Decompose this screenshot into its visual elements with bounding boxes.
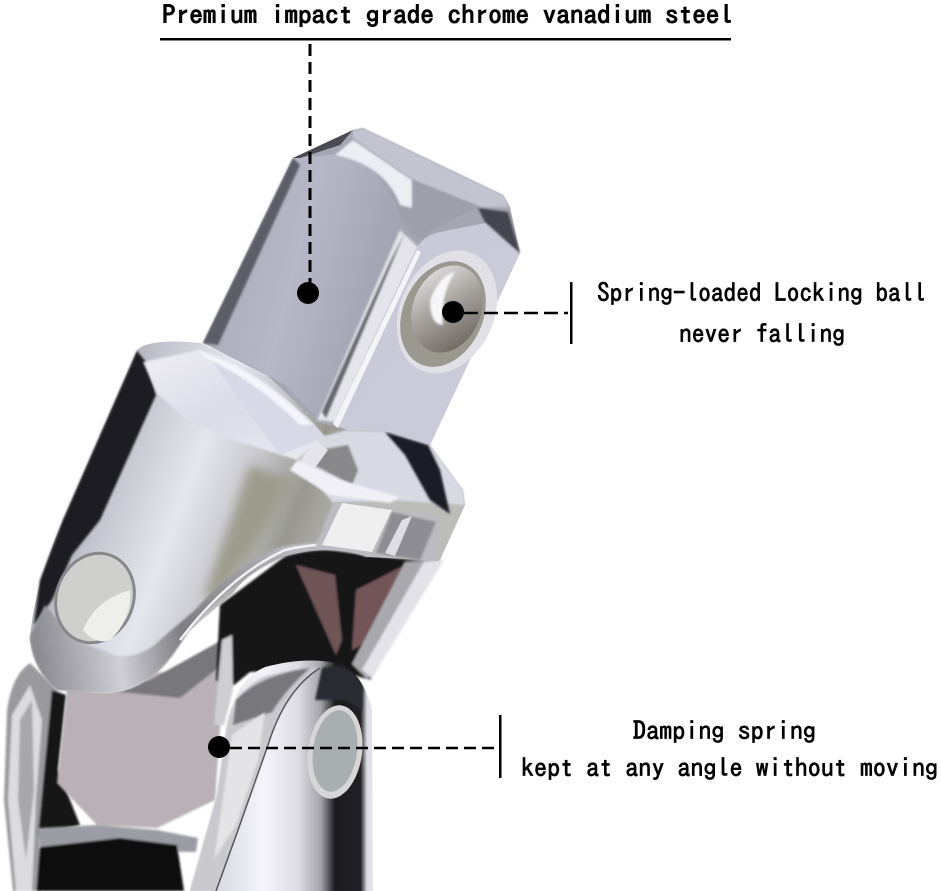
label line one: Damping spring bbox=[633, 718, 816, 744]
upper pin bbox=[41, 540, 149, 656]
label line one: Spring-loaded Locking ball bbox=[597, 280, 926, 306]
heading text: Premium impact grade chrome vanadium steel bbox=[162, 2, 733, 28]
bright lip line bbox=[180, 544, 360, 640]
dark edge strip bbox=[34, 351, 156, 625]
right face bbox=[333, 222, 520, 445]
marker dot bbox=[297, 282, 319, 304]
top chamfers bbox=[353, 128, 510, 207]
dark stripe above pin bbox=[315, 666, 363, 710]
cap diagonal reflection bbox=[205, 352, 325, 455]
lower yoke right arm bbox=[190, 660, 373, 891]
heading underline bbox=[160, 38, 731, 40]
right collar bbox=[297, 430, 465, 505]
bracket bar bbox=[499, 715, 502, 778]
callout: steel material bbox=[160, 2, 733, 304]
dashed leader bbox=[464, 312, 568, 314]
marker dot bbox=[442, 301, 464, 323]
bracket bar bbox=[570, 282, 572, 344]
dark interior of the joint bbox=[214, 545, 444, 725]
flat face bbox=[203, 153, 400, 417]
cap top bbox=[143, 350, 325, 460]
callout: damping spring bbox=[208, 715, 938, 781]
square drive end bbox=[203, 128, 520, 445]
olive reflection bbox=[205, 465, 295, 600]
lower square block bbox=[37, 640, 225, 891]
marker dot bbox=[208, 736, 230, 758]
upper yoke body bbox=[30, 342, 465, 693]
dashed leader bbox=[308, 44, 312, 285]
label line two: never falling bbox=[679, 321, 845, 347]
locking ball bbox=[399, 255, 495, 363]
lower lip bbox=[30, 542, 370, 693]
label line two: kept at any angle without moving bbox=[521, 755, 938, 781]
dashed leader bbox=[230, 747, 497, 749]
lower yoke left arm bbox=[4, 663, 80, 891]
product photo: chrome universal joint bbox=[4, 128, 520, 891]
locking ball socket bbox=[378, 234, 516, 390]
lower pin bbox=[302, 702, 368, 802]
callout: locking ball bbox=[442, 280, 926, 347]
collar band bbox=[315, 502, 440, 562]
bright base band bbox=[198, 350, 312, 425]
